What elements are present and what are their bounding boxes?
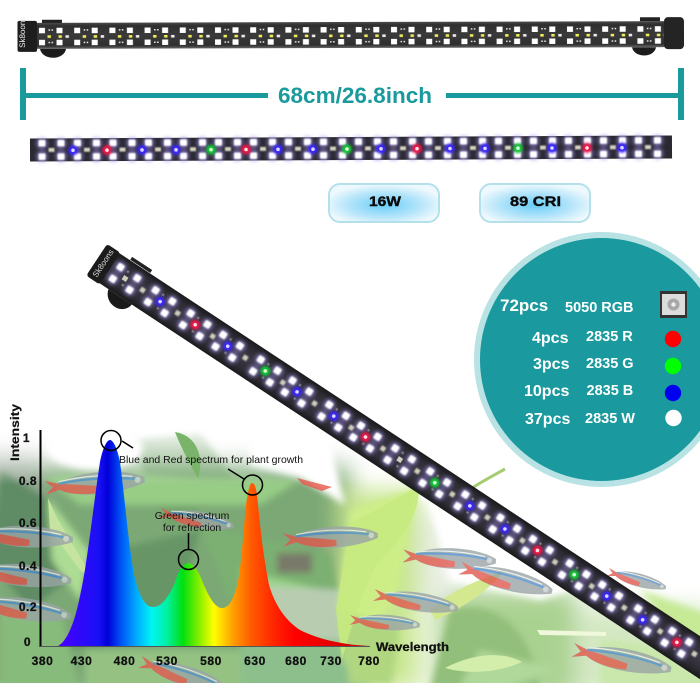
y axis labels: 0.4 — [19, 559, 37, 573]
x axis labels: 630 — [244, 654, 266, 668]
row: 2835 B: 10pcs — [524, 383, 569, 400]
callout: red peak — [228, 469, 262, 495]
y axis labels: 0.2 — [19, 600, 37, 614]
second bar, LEDs lit — [30, 135, 672, 162]
x axis labels: 430 — [71, 654, 92, 668]
left end cap — [17, 17, 37, 52]
y axis labels: 1 — [23, 431, 30, 445]
icon: red LED — [665, 331, 681, 347]
x axis labels: 530 — [156, 654, 178, 668]
row: 2835 B — [524, 383, 633, 400]
icon: green LED — [665, 358, 681, 374]
colour LEDs — [68, 143, 627, 155]
suction cup — [102, 289, 132, 314]
row: 2835 G: 2835 G — [586, 356, 634, 372]
icon: 5050 chip — [660, 291, 687, 318]
top product bar, LEDs off — [17, 15, 684, 58]
white LEDs — [36, 135, 663, 162]
row: 2835 W — [525, 411, 635, 428]
background photo: aquarium plants and fish — [0, 432, 700, 683]
x axis baseline — [40, 646, 370, 647]
badge: 89 CRI: 89 CRI — [510, 193, 561, 209]
dimension line — [20, 68, 684, 120]
fish group — [0, 468, 673, 698]
suction cups — [40, 47, 656, 58]
row: 2835 G — [533, 356, 634, 373]
dimension label: 68cm/26.8inch — [278, 83, 432, 108]
callout text: green — [155, 511, 229, 534]
x axis labels — [32, 654, 380, 668]
y axis labels: 0.6 — [19, 516, 37, 530]
tube — [97, 251, 700, 700]
left line — [26, 93, 268, 98]
right end cap — [664, 17, 684, 49]
end cap: Sk8oons — [91, 248, 116, 279]
x axis labels: 380 — [32, 654, 53, 668]
x axis labels: 480 — [114, 654, 135, 668]
y axis title: Intensity — [8, 404, 22, 461]
panel: LED specification circle — [474, 232, 700, 487]
row: 2835 W: 2835 W — [585, 411, 635, 427]
badge: 16W: 16W — [369, 193, 402, 209]
row: 2835 R — [532, 329, 633, 347]
row: 2835 B: 2835 B — [586, 383, 633, 399]
y axis labels: 0 — [24, 635, 31, 649]
right tick — [678, 68, 684, 120]
badge: 16W — [329, 184, 439, 222]
bottom white strip — [0, 683, 700, 700]
right line — [446, 93, 678, 98]
clip — [130, 257, 152, 273]
x axis labels: 580 — [200, 654, 222, 668]
x axis labels: 680 — [285, 654, 307, 668]
badge: 89 CRI — [480, 184, 590, 222]
x axis labels: 780 — [358, 654, 380, 668]
diagonal product bar, LEDs lit — [81, 241, 700, 700]
photo veil — [0, 440, 700, 683]
y axis labels: 0.8 — [19, 474, 37, 488]
row: 2835 R: 4pcs — [532, 330, 569, 347]
leaves — [48, 432, 606, 672]
row: 2835 W: 37pcs — [525, 411, 570, 428]
icon: white LED — [665, 410, 682, 426]
row: 2835 G: 3pcs — [533, 356, 570, 373]
x axis labels: 730 — [320, 654, 342, 668]
tube — [30, 135, 672, 162]
icon: blue LED — [665, 385, 681, 401]
white LEDs — [105, 260, 700, 666]
left tick — [20, 68, 26, 120]
y axis — [40, 430, 42, 647]
colour LEDs — [120, 273, 684, 649]
y axis labels — [19, 431, 37, 649]
callout text: green: Green spectrum — [155, 511, 229, 522]
left end cap: Sk8oons — [18, 17, 27, 48]
callout text: green: for refrection — [163, 523, 221, 534]
tube — [34, 21, 670, 49]
callout: blue peak — [101, 430, 133, 450]
x axis title: Wavelength — [376, 640, 449, 654]
chart: light spectrum — [8, 404, 449, 668]
row: 5050 RGB: 5050 RGB — [565, 300, 634, 316]
row: 2835 R: 2835 R — [586, 329, 633, 345]
clips — [42, 17, 660, 24]
row: 5050 RGB — [500, 296, 634, 316]
spectrum curve — [58, 440, 370, 646]
row: 5050 RGB: 72pcs — [500, 296, 548, 315]
LED pattern — [36, 21, 664, 49]
white photo highlights — [48, 438, 570, 604]
callout text: blue and red: Blue and Red spectrum for plant growth — [119, 455, 303, 466]
callout: green peak — [178, 533, 198, 570]
end cap — [86, 244, 120, 284]
